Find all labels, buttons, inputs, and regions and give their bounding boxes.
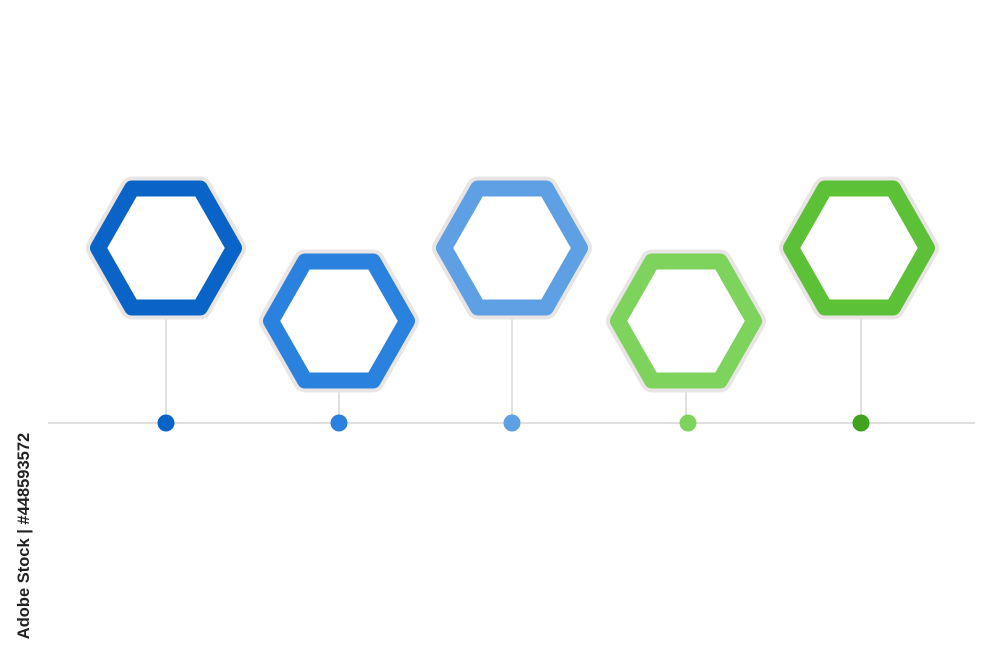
step 5 <box>791 188 927 432</box>
timeline axis <box>48 422 975 424</box>
step 3 <box>444 188 580 432</box>
step 2 <box>271 262 407 432</box>
step 1 <box>98 188 234 432</box>
watermark id text: Adobe Stock | #448593572 <box>15 433 33 639</box>
step 4 <box>618 262 754 432</box>
